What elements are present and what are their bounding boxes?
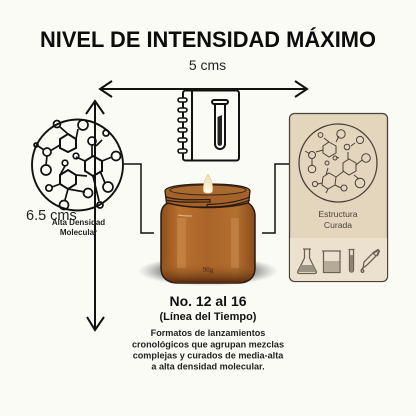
connector: jar to panel <box>262 164 290 233</box>
description: complejas y curados de media-alta <box>133 350 284 360</box>
panel caption <box>318 209 358 230</box>
candle flame <box>203 174 213 193</box>
jar shadow <box>138 256 278 286</box>
icon: test tube <box>348 250 354 272</box>
jar weight: 90g <box>203 266 214 274</box>
panel caption: Curada <box>324 220 352 230</box>
description: Formatos de lanzamientos <box>151 328 265 338</box>
jar rim and neck <box>165 184 250 207</box>
molecule caption: Molecular <box>60 228 97 237</box>
arrow: height dimension <box>86 101 104 330</box>
icon: candle jar <box>138 174 278 286</box>
icon: beaker <box>322 251 341 272</box>
description: a alta densidad molecular. <box>151 362 265 372</box>
icon: panel molecule <box>299 124 377 202</box>
molecule caption <box>52 218 105 237</box>
heading: range: No. 12 al 16 <box>169 293 247 309</box>
description <box>132 328 284 372</box>
arrow: width dimension <box>100 81 307 97</box>
subheading: (Línea del Tiempo) <box>160 311 257 323</box>
connector: left circle to jar <box>124 164 154 233</box>
panel: curated structure <box>290 114 388 282</box>
height label: 6.5 cms <box>26 208 77 224</box>
title: NIVEL DE INTENSIDAD MÁXIMO <box>40 27 376 52</box>
panel caption: Estructura <box>318 209 358 219</box>
description: cronológicos que agrupan mezclas <box>132 340 284 350</box>
panel footer <box>290 238 387 281</box>
jar body <box>161 203 255 283</box>
icon: molecule circle <box>32 120 123 210</box>
width label: 5 cms <box>189 57 226 73</box>
icon: notebook with test tube <box>178 90 239 160</box>
icon: dropper <box>361 250 379 272</box>
jar threads <box>166 197 250 207</box>
icon: flask <box>298 249 316 274</box>
molecule caption: Alta Densidad <box>52 218 105 227</box>
